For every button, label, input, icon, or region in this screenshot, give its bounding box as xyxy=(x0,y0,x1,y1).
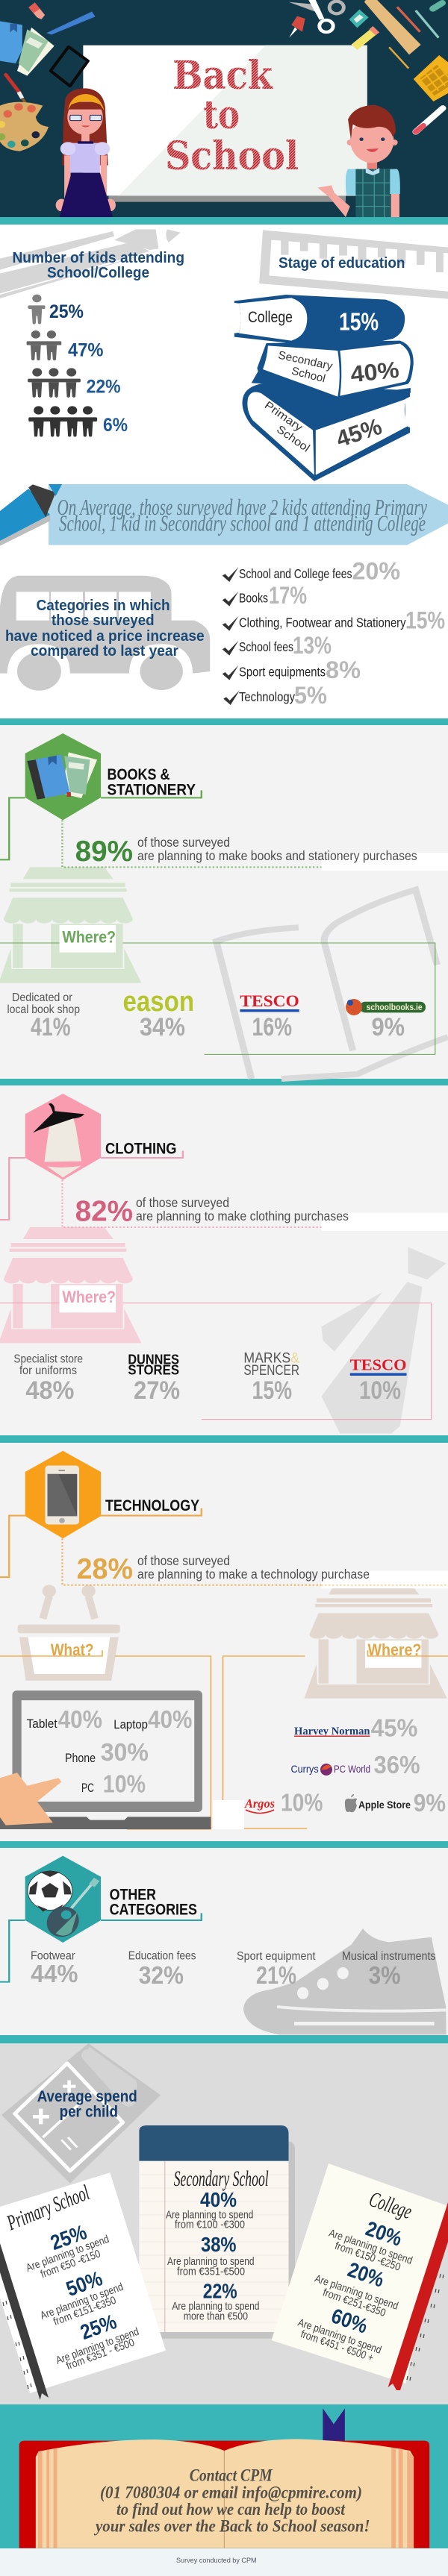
where label: Where? xyxy=(62,927,116,946)
connector lines xyxy=(0,1508,448,1829)
title xyxy=(165,53,299,179)
card: primary school: Are planning to spend xyxy=(39,2281,125,2322)
card: secondary school notepad: Are planning to spend xyxy=(166,2208,253,2221)
book labels xyxy=(248,308,400,455)
card: primary school: 25% xyxy=(47,2220,90,2254)
watermark: pencil xyxy=(0,229,181,298)
retailer: eason: 34% xyxy=(140,1013,185,1041)
what: device percentages: Phone xyxy=(65,1751,96,1765)
retailer: book shop xyxy=(7,991,80,1041)
checklist percentages: 5% xyxy=(294,682,327,709)
what: device percentages: Tablet xyxy=(27,1717,57,1731)
statistic: of those surveyed xyxy=(137,1553,230,1568)
contact text: (01 7080304 or email info@cpmire.com) xyxy=(100,2483,362,2501)
title: Back xyxy=(172,53,273,98)
statistic: 28% xyxy=(77,1553,133,1585)
card: primary school xyxy=(0,2172,166,2400)
white strip xyxy=(321,853,448,871)
percentages xyxy=(49,301,128,436)
what: device percentages: 30% xyxy=(101,1738,149,1766)
illustration: open book xyxy=(19,2408,429,2548)
heading: per child xyxy=(60,2104,118,2121)
highlighter xyxy=(0,484,448,546)
what: device percentages xyxy=(27,1705,192,1798)
retailer: book shop: 41% xyxy=(31,1013,70,1041)
watermark: shop xyxy=(0,867,141,983)
checklist labels: School fees xyxy=(239,639,293,654)
watermark: shop xyxy=(304,1582,447,1699)
illustration: laptop with hand xyxy=(0,1690,211,1829)
statistic: 82% xyxy=(75,1196,133,1228)
heading: STATIONERY xyxy=(108,782,196,799)
book labels: 15% xyxy=(339,308,379,336)
title: School xyxy=(165,134,299,179)
category: musical instruments xyxy=(342,1950,436,1989)
where: retailers: PC World xyxy=(334,1763,370,1775)
retailer: specialist store: 48% xyxy=(25,1376,74,1405)
category: musical instruments: 3% xyxy=(369,1961,400,1989)
watermark: school bus xyxy=(0,576,210,691)
retailer: specialist store: for uniforms xyxy=(19,1364,77,1377)
retailer: tesco: 10% xyxy=(359,1376,401,1405)
panel: books and stationery xyxy=(0,733,448,1079)
retailer: tesco xyxy=(350,1356,406,1405)
book labels: Secondary xyxy=(277,349,334,373)
white strip xyxy=(213,1571,448,1829)
card: secondary school notepad: more than €500 xyxy=(184,2310,248,2322)
percentages: 22% xyxy=(87,377,121,398)
heading xyxy=(37,2088,137,2121)
watermark: tie xyxy=(321,1247,447,1434)
category: sport equipment: Sport equipment xyxy=(237,1950,316,1963)
card: secondary school notepad: from €351-€500 xyxy=(177,2265,245,2278)
panel: stage of education xyxy=(234,230,448,481)
where: retailers: Argos xyxy=(244,1796,275,1811)
retailer: schoolbooks.ie xyxy=(346,999,426,1041)
checklist percentages: 8% xyxy=(326,656,361,683)
card: primary school: from €151-€350 xyxy=(52,2295,118,2328)
where: retailers: 36% xyxy=(373,1751,420,1779)
checklist percentages: 17% xyxy=(269,582,307,609)
retailer: tesco: 16% xyxy=(252,1013,292,1041)
checklist labels xyxy=(239,566,406,704)
heading xyxy=(12,250,184,281)
card: primary school: Are planning to spend xyxy=(25,2234,111,2275)
school supplies right xyxy=(288,0,448,132)
card: secondary school notepad: 22% xyxy=(203,2280,237,2303)
book labels: 40% xyxy=(349,357,400,387)
connector lines xyxy=(0,790,448,1054)
illustration: girl xyxy=(56,88,116,217)
card: secondary school notepad: 40% xyxy=(200,2188,237,2211)
retailer: tesco: TESCO xyxy=(350,1356,406,1374)
what and where labels: What? xyxy=(51,1640,94,1659)
heading: those surveyed xyxy=(52,612,155,629)
whiteboard xyxy=(83,46,367,202)
what: device percentages: Laptop xyxy=(113,1717,148,1732)
title: to xyxy=(203,93,240,138)
banner text xyxy=(57,494,427,536)
retailer: marks and spencer xyxy=(243,1351,299,1405)
retailer: dunnes stores: DUNNES xyxy=(128,1352,179,1367)
heading: CATEGORIES xyxy=(110,1902,197,1919)
statistic: of those surveyed xyxy=(136,1195,229,1210)
checklist labels: School and College fees xyxy=(239,566,352,581)
checklist labels: Sport equipments xyxy=(239,665,326,680)
school supplies left xyxy=(0,2,94,151)
category: footwear: Footwear xyxy=(31,1950,75,1963)
heading: Stage of education xyxy=(279,255,405,272)
heading: Average spend xyxy=(37,2088,137,2105)
what and where labels xyxy=(51,1640,421,1659)
what: device percentages: 10% xyxy=(103,1770,146,1798)
book labels: School xyxy=(290,365,326,385)
statistic xyxy=(75,1195,349,1228)
retailer: dunnes stores xyxy=(128,1352,180,1405)
footer note: Survey conducted by CPM xyxy=(176,2557,257,2565)
heading: compared to last year xyxy=(31,643,178,659)
connector lines xyxy=(0,1913,202,1982)
watermark: shop xyxy=(0,1227,141,1343)
heading: School/College xyxy=(47,265,149,281)
panel: contact call to action xyxy=(19,2408,429,2548)
where: retailers: 10% xyxy=(281,1788,323,1816)
statistic: are planning to make books and stationery purchases xyxy=(137,848,417,863)
book labels: Primary xyxy=(262,399,305,434)
where: retailers: Apple Store xyxy=(358,1799,411,1811)
contact text xyxy=(93,2466,370,2535)
retailer: marks and spencer: SPENCER xyxy=(243,1363,299,1379)
heading: TECHNOLOGY xyxy=(105,1497,199,1514)
card: college: Are planning to spend xyxy=(327,2228,414,2267)
card: college: Are planning to spend xyxy=(313,2273,399,2313)
heading xyxy=(110,1887,197,1919)
checklist percentages: 13% xyxy=(293,632,332,659)
panel: clothing xyxy=(0,1094,448,1434)
retailer: book shop: Dedicated or xyxy=(12,991,73,1004)
retailer: tesco xyxy=(240,991,299,1041)
where label: Where? xyxy=(62,1288,116,1306)
retailer: specialist store xyxy=(13,1353,83,1405)
heading: CLOTHING xyxy=(105,1141,176,1158)
where: retailers xyxy=(244,1714,446,1817)
retailer: eason xyxy=(122,986,194,1041)
heading xyxy=(108,766,196,799)
contact text: Contact CPM xyxy=(190,2466,273,2485)
card: secondary school notepad: Are planning to spend xyxy=(172,2300,260,2313)
book labels: College xyxy=(248,309,293,326)
card: college: from €251-€350 xyxy=(321,2287,388,2319)
book labels: School xyxy=(274,423,312,455)
category: education fees xyxy=(128,1950,196,1989)
retailer: marks and spencer: MARKS& xyxy=(243,1351,299,1367)
retailer: tesco: TESCO xyxy=(240,991,299,1010)
retailer: marks and spencer: 15% xyxy=(252,1376,292,1405)
watermark: ruler xyxy=(259,230,448,299)
panel: number of kids xyxy=(0,229,184,437)
category: sport equipment xyxy=(237,1950,316,1989)
heading: Categories in which xyxy=(37,598,170,614)
card: college: Are planning to spend xyxy=(296,2317,383,2357)
connector lines xyxy=(0,1151,448,1420)
what: device percentages: 40% xyxy=(148,1705,193,1733)
watermark: open book xyxy=(217,890,448,1079)
people icons xyxy=(27,295,97,437)
statistic: are planning to make clothing purchases xyxy=(136,1209,349,1223)
where: retailers: 45% xyxy=(371,1714,417,1741)
icon: phone hexagon xyxy=(25,1451,101,1538)
white strip xyxy=(321,1213,448,1231)
card: secondary school notepad xyxy=(139,2125,295,2339)
contact text: your sales over the Back to School season! xyxy=(93,2516,370,2535)
where: retailers: Currys xyxy=(291,1763,319,1775)
category: musical instruments: Musical instruments xyxy=(342,1950,436,1963)
heading: have noticed a price increase xyxy=(5,628,205,645)
what and where labels: Where? xyxy=(367,1640,421,1659)
statistic: of those surveyed xyxy=(137,835,230,850)
checklist percentages xyxy=(269,558,445,709)
card: college: from €451 - €500 + xyxy=(299,2328,375,2364)
card: primary school: 25% xyxy=(77,2310,119,2344)
card: primary school: from €50 -€150 xyxy=(39,2248,102,2281)
card: college: 20% xyxy=(363,2216,405,2251)
watermark: basket xyxy=(18,1585,120,1681)
card: primary school: 50% xyxy=(63,2266,105,2301)
card: college: 20% xyxy=(345,2257,387,2292)
statistic xyxy=(77,1553,370,1585)
category: sport equipment: 21% xyxy=(256,1961,296,1989)
checklist labels: Technology xyxy=(239,689,295,704)
card: secondary school notepad: Are planning to spend xyxy=(167,2255,255,2268)
card: college: 60% xyxy=(329,2304,370,2338)
retailer: book shop: local book shop xyxy=(7,1003,80,1016)
percentages: 6% xyxy=(103,415,128,436)
contact text: to find out how we can help to boost xyxy=(116,2500,346,2519)
panel: average kids banner xyxy=(0,484,448,546)
retailer: eason: eason xyxy=(122,986,194,1018)
checklist percentages: 20% xyxy=(352,558,400,585)
percentages: 25% xyxy=(49,301,84,322)
icon: ball and guitar hexagon xyxy=(25,1856,101,1943)
illustration: boy xyxy=(318,105,400,217)
heading xyxy=(5,598,205,659)
card: college: from €150 -€250 xyxy=(333,2240,402,2274)
where: retailers: 9% xyxy=(414,1789,446,1817)
retailer: dunnes stores: STORES xyxy=(128,1363,179,1378)
card: secondary school notepad: Secondary School xyxy=(174,2166,269,2191)
card: primary school: from €351 - €500 xyxy=(65,2337,136,2372)
where: retailers: Harvey Norman xyxy=(294,1726,370,1737)
retailer: schoolbooks.ie: schoolbooks.ie xyxy=(367,1002,423,1012)
watermark: sneaker xyxy=(243,1928,447,2034)
icon: books hexagon xyxy=(25,733,101,820)
panel: header xyxy=(0,0,448,217)
icon: clothing hexagon xyxy=(25,1094,101,1180)
panel: average spend xyxy=(0,2043,448,2400)
checklist ticks xyxy=(223,567,240,705)
statistic: 89% xyxy=(75,836,133,868)
panel: technology xyxy=(0,1451,448,1829)
category: education fees: 32% xyxy=(139,1961,184,1989)
card: secondary school notepad: from €100 -€300 xyxy=(175,2219,245,2231)
retailer: specialist store: Specialist store xyxy=(13,1353,83,1366)
book stack xyxy=(234,295,414,481)
heading: BOOKS & xyxy=(108,766,170,783)
what: device percentages: 40% xyxy=(58,1705,102,1733)
what: device percentages: PC xyxy=(81,1781,94,1795)
retailer: dunnes stores: 27% xyxy=(134,1376,180,1405)
card: primary school: Are planning to spend xyxy=(55,2326,140,2367)
panel: other categories xyxy=(0,1856,447,2034)
statistic: are planning to make a technology purchase xyxy=(137,1567,370,1582)
checklist labels: Books xyxy=(239,591,268,606)
checklist labels: Clothing, Footwear and Stationery xyxy=(239,615,406,630)
statistic xyxy=(75,835,417,868)
book labels: 45% xyxy=(333,413,385,452)
percentages: 47% xyxy=(68,340,103,361)
category: footwear: 44% xyxy=(31,1960,78,1987)
category: education fees: Education fees xyxy=(128,1950,196,1963)
watermark: calculator xyxy=(1,2043,161,2184)
card: college: College xyxy=(366,2187,415,2224)
card: primary school: Primary School xyxy=(3,2181,93,2235)
retailer: schoolbooks.ie: 9% xyxy=(372,1013,405,1041)
heading: OTHER xyxy=(110,1887,156,1904)
heading: Number of kids attending xyxy=(12,250,184,266)
panel: price increase categories xyxy=(0,558,445,709)
card: college xyxy=(272,2163,448,2390)
card: secondary school notepad: 38% xyxy=(201,2233,237,2256)
